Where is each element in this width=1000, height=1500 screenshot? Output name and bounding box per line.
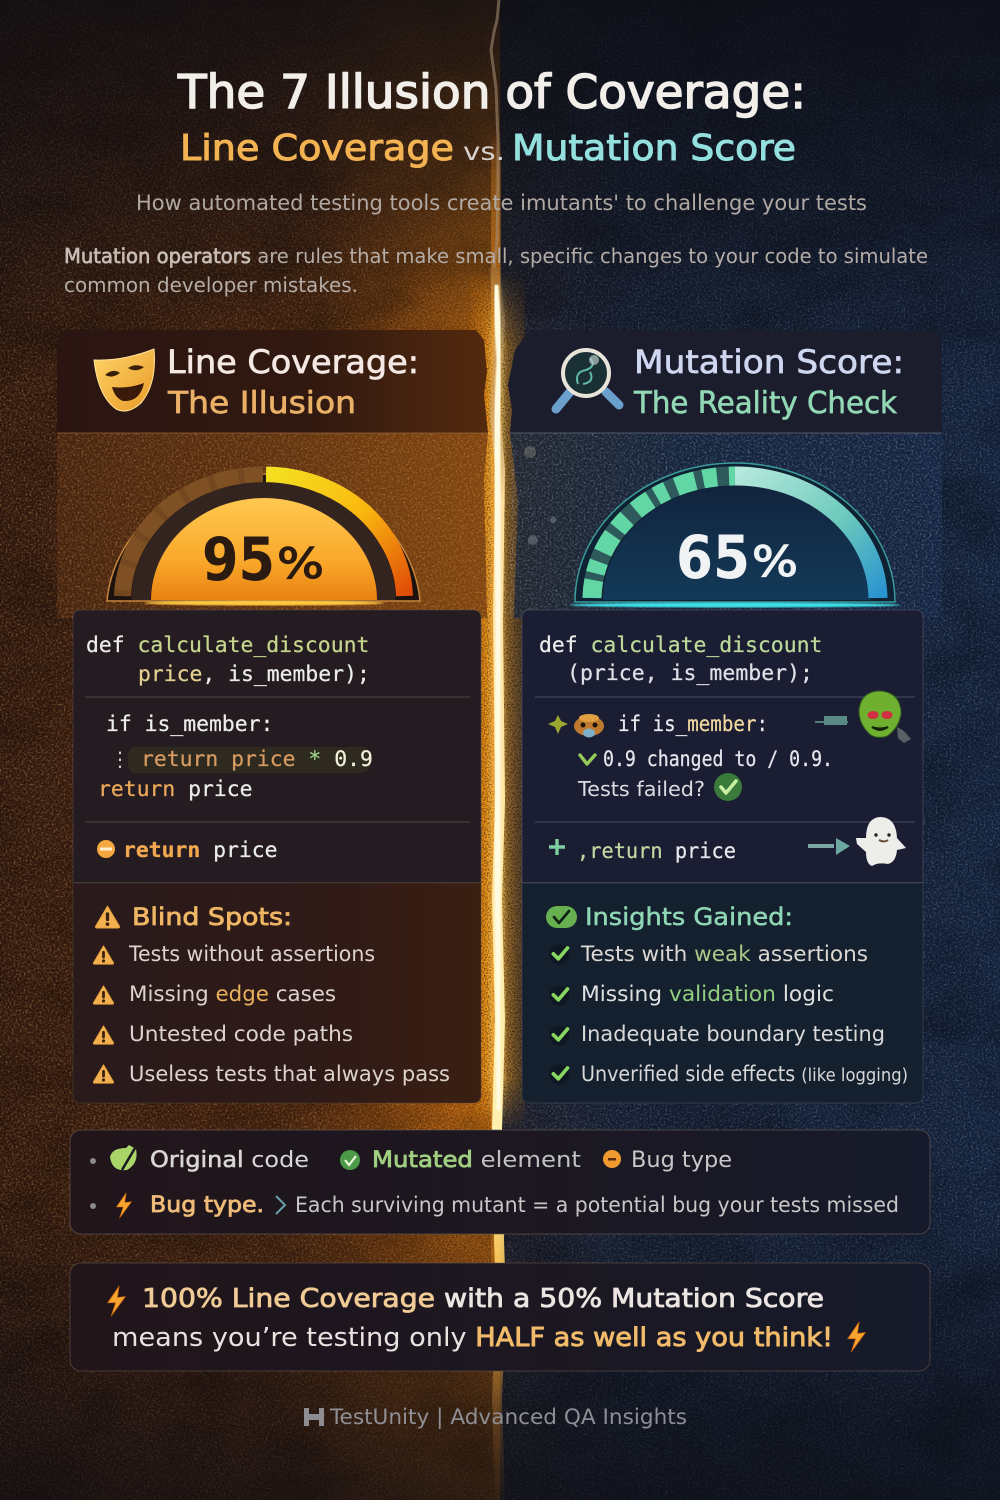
tagline: How automated testing tools create imutants' to challenge your tests [136, 191, 867, 215]
gauge zone background [510, 433, 942, 618]
blind spots list: Tests without assertions [128, 942, 375, 966]
crack: glowing fracture line [470, 0, 525, 1500]
panel header [57, 330, 488, 433]
panel heading: Mutation Score: [634, 343, 904, 381]
title block [177, 65, 806, 169]
blind spots list [73, 883, 481, 1103]
legend: mutated element: Mutated element [372, 1147, 581, 1173]
intro paragraph: Mutation operators are rules that make small, specific changes to your code to simulate [64, 244, 928, 268]
code: signature: def calculate_discount [539, 633, 822, 658]
code: mutated condition: if is_member: [618, 712, 768, 737]
insights list: Missing validation logic [581, 982, 834, 1006]
panel header [508, 330, 942, 433]
removed line [97, 840, 115, 858]
blind spots list: Untested code paths [129, 1022, 353, 1046]
insights list: Inadequate boundary testing [581, 1022, 885, 1046]
blind spots list: Missing edge cases [129, 982, 336, 1006]
blind spots list: Blind Spots: [132, 903, 292, 931]
code panel: ,return price [577, 839, 736, 864]
gauge: 95% [107, 474, 420, 606]
icon: check badge [546, 906, 577, 928]
panel: mutation score: The Reality Check [633, 386, 898, 421]
intro paragraph [64, 244, 928, 297]
subtitle line 2: vs. [463, 137, 505, 166]
title line 1: The 7 Illusion of Coverage: [177, 65, 806, 119]
panel: line coverage: The Illusion [167, 386, 356, 421]
subtitle line 2: Line Coverage [180, 128, 454, 169]
intro paragraph: common developer mistakes. [64, 273, 358, 297]
code panel: Tests failed? [577, 777, 705, 801]
insights list: Tests with weak assertions [580, 942, 868, 966]
gauge zone background [57, 433, 488, 618]
icon: magnifying glass [556, 350, 619, 409]
code panel: return price * 0.9 [141, 747, 373, 772]
gauge value: % [752, 537, 798, 586]
added line [549, 839, 565, 855]
footer: TestUnity | Advanced QA Insights [329, 1405, 687, 1430]
callout [70, 1263, 930, 1371]
icon: bug dot [603, 1150, 621, 1168]
callout: means you’re testing only HALF as well as you think! [112, 1323, 833, 1353]
insights list [522, 883, 923, 1103]
legend: note: Each surviving mutant = a potential bug your tests missed [295, 1193, 899, 1217]
legend box [70, 1130, 930, 1234]
icon: check [340, 1150, 360, 1170]
legend: note: Bug type. [150, 1192, 264, 1218]
icon: warning [95, 906, 120, 928]
icon: logo [304, 1408, 324, 1426]
legend: original code: Original code [150, 1147, 309, 1173]
icon: tiger mutant [574, 714, 604, 738]
panel: line coverage [57, 330, 488, 1103]
insights list: Unverified side effects (like logging) [581, 1062, 908, 1086]
gauge value: % [277, 539, 324, 588]
subtitle line 2 [180, 128, 796, 169]
icon: theatre mask [94, 349, 154, 411]
icon: leaf [110, 1145, 137, 1170]
gauge value [676, 523, 798, 593]
gauge value: 65 [676, 523, 750, 593]
code: body: if is_member: [106, 712, 273, 737]
code panel: (price, is_member); [567, 661, 813, 686]
blind spots list: Useless tests that always pass [129, 1062, 450, 1086]
insights list: Insights Gained: [585, 903, 793, 931]
panel: mutation score [508, 330, 942, 1103]
code panel: return price [98, 777, 253, 802]
code panel: return price [123, 838, 278, 863]
icon: sparkle [548, 715, 568, 734]
code: signature: def calculate_discount [86, 633, 369, 658]
gauge value [202, 525, 324, 595]
icon: ghost with arrow [808, 817, 906, 866]
callout: 100% Line Coverage with a 50% Mutation Score [142, 1284, 824, 1314]
icon: passed check [714, 773, 742, 801]
code panel: ⋮ [110, 747, 130, 771]
subtitle line 2: Mutation Score [512, 128, 796, 169]
gauge value: 95 [202, 525, 275, 595]
panel heading: Line Coverage: [167, 343, 419, 381]
code panel: 0.9 changed to / 0.9. [603, 747, 833, 772]
code panel [522, 610, 923, 883]
gauge: 65% [570, 463, 900, 608]
legend: bug type: Bug type [631, 1147, 732, 1173]
code panel [73, 610, 481, 883]
code panel: price, is_member); [138, 662, 370, 687]
icon: alien mutant with arrow [815, 691, 911, 743]
